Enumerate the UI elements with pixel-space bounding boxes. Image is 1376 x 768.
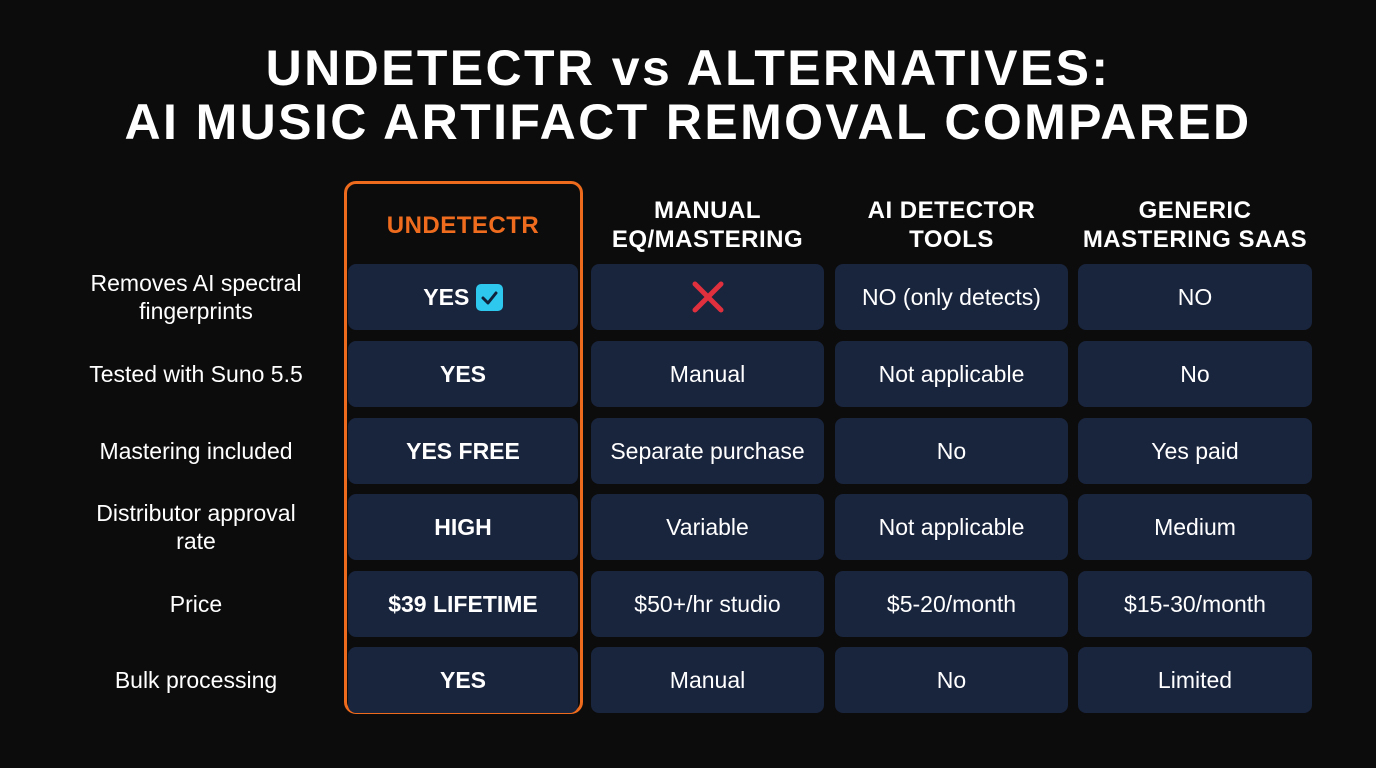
cell: NO (only detects)	[862, 284, 1041, 310]
header: ai detector tools	[868, 197, 1035, 253]
cell: No	[1180, 360, 1210, 386]
row label	[96, 500, 296, 554]
cell	[591, 341, 824, 407]
cell	[1078, 264, 1312, 330]
cell: YES	[440, 360, 486, 386]
header: generic mastering saas	[1083, 197, 1307, 253]
header: undetectr: UNDETECTR	[387, 212, 539, 238]
cell	[348, 571, 578, 637]
cell	[1078, 647, 1312, 713]
header: ai detector tools: AI DETECTOR	[868, 197, 1035, 224]
cell: No	[937, 666, 966, 692]
cell	[835, 418, 1068, 484]
cell	[348, 494, 578, 560]
cell: yes with check: YES	[423, 284, 469, 310]
cell: red cross	[591, 264, 824, 330]
cell	[1078, 418, 1312, 484]
cell: Yes paid	[1151, 438, 1239, 464]
header: manual eq: MANUAL	[654, 197, 761, 224]
row label: Mastering included	[99, 438, 293, 464]
cell: Medium	[1154, 514, 1236, 540]
cell: YES FREE	[406, 438, 520, 464]
cell: $5-20/month	[887, 590, 1016, 616]
cell: $50+/hr studio	[634, 590, 781, 616]
cell	[591, 418, 824, 484]
cell	[1078, 571, 1312, 637]
cell	[1078, 341, 1312, 407]
header: generic mastering saas: MASTERING SAAS	[1083, 226, 1307, 253]
cell	[348, 647, 578, 713]
cell	[1078, 494, 1312, 560]
cell	[591, 571, 824, 637]
row label: Tested with Suno 5.5	[89, 361, 303, 387]
cell: Not applicable	[879, 360, 1024, 386]
cell: NO	[1178, 284, 1212, 310]
cell	[591, 647, 824, 713]
title	[125, 40, 1251, 150]
row label: Price	[170, 591, 222, 617]
title: UNDETECTR vs ALTERNATIVES:	[266, 40, 1110, 96]
cell	[348, 341, 578, 407]
row label: Bulk processing	[115, 667, 277, 693]
row label: rate	[176, 528, 216, 554]
cell: yes with check	[348, 264, 578, 330]
title: AI MUSIC ARTIFACT REMOVAL COMPARED	[125, 94, 1251, 150]
cell	[835, 647, 1068, 713]
cell: Not applicable	[879, 514, 1024, 540]
cell: Manual	[670, 360, 745, 386]
row label: Distributor approval	[96, 500, 296, 526]
header: manual eq	[612, 197, 803, 253]
row label: removes fingerprints: Removes AI spectral	[91, 270, 301, 296]
cell: Manual	[670, 666, 745, 692]
cell	[591, 494, 824, 560]
cell	[835, 264, 1068, 330]
row label: removes fingerprints: fingerprints	[139, 298, 253, 324]
cell: YES	[440, 666, 486, 692]
cell	[835, 571, 1068, 637]
cell: $15-30/month	[1124, 590, 1266, 616]
cell: HIGH	[434, 514, 492, 540]
cell	[835, 494, 1068, 560]
header: ai detector tools: TOOLS	[909, 226, 994, 253]
cell: No	[937, 438, 966, 464]
header: generic mastering saas: GENERIC	[1139, 197, 1251, 224]
cell	[348, 418, 578, 484]
row label: removes fingerprints	[91, 270, 301, 324]
cell: Variable	[666, 514, 749, 540]
cell	[835, 341, 1068, 407]
highlight frame: undetectr column	[344, 181, 583, 714]
cell: $39 LIFETIME	[388, 590, 538, 616]
cell: Limited	[1158, 666, 1232, 692]
header: manual eq: EQ/MASTERING	[612, 226, 803, 253]
cell: Separate purchase	[610, 438, 805, 464]
